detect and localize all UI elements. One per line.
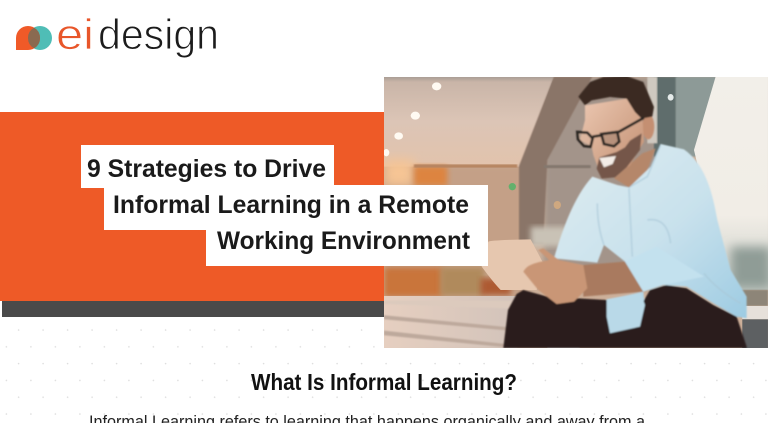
section heading: What Is Informal Learning? [251,369,517,395]
shirt back tail behind legs [634,291,646,301]
photo: smiling man with tablet [383,76,768,348]
title block [81,145,488,266]
title line 3 box [206,227,488,266]
photo: steps [384,296,581,348]
title line 3 box: Working Environment [217,227,471,255]
neck [614,148,656,187]
dotted background pattern [0,323,768,423]
logo wordmark: design [98,11,219,59]
forearm [583,262,643,297]
photo: tablet [482,239,543,290]
photo: ceiling lights [383,82,441,156]
trousers [503,285,747,348]
logo wordmark: ei [56,11,94,59]
title line 2 box [104,185,488,230]
panel: orange banner [0,112,385,301]
ear [642,114,654,139]
face [579,98,644,167]
beard [597,133,642,179]
shirt cuff [626,262,702,291]
shirt folds [596,146,671,256]
logo: eidesign [16,11,219,59]
hair [578,76,654,119]
photo: man [503,76,747,348]
title line 1 box: 9 Strategies to Drive [87,155,326,183]
shirt [554,144,747,318]
title line 2 box: Informal Learning in a Remote [113,191,469,219]
shirt tail over thigh [607,293,645,333]
icon: logo speech-bubble circles [16,26,52,50]
photo background [384,77,768,348]
title line 1 box [81,145,334,188]
panel: dark shadow strip [2,301,385,317]
glasses [577,118,644,147]
smile [599,156,616,167]
hand [523,248,587,304]
